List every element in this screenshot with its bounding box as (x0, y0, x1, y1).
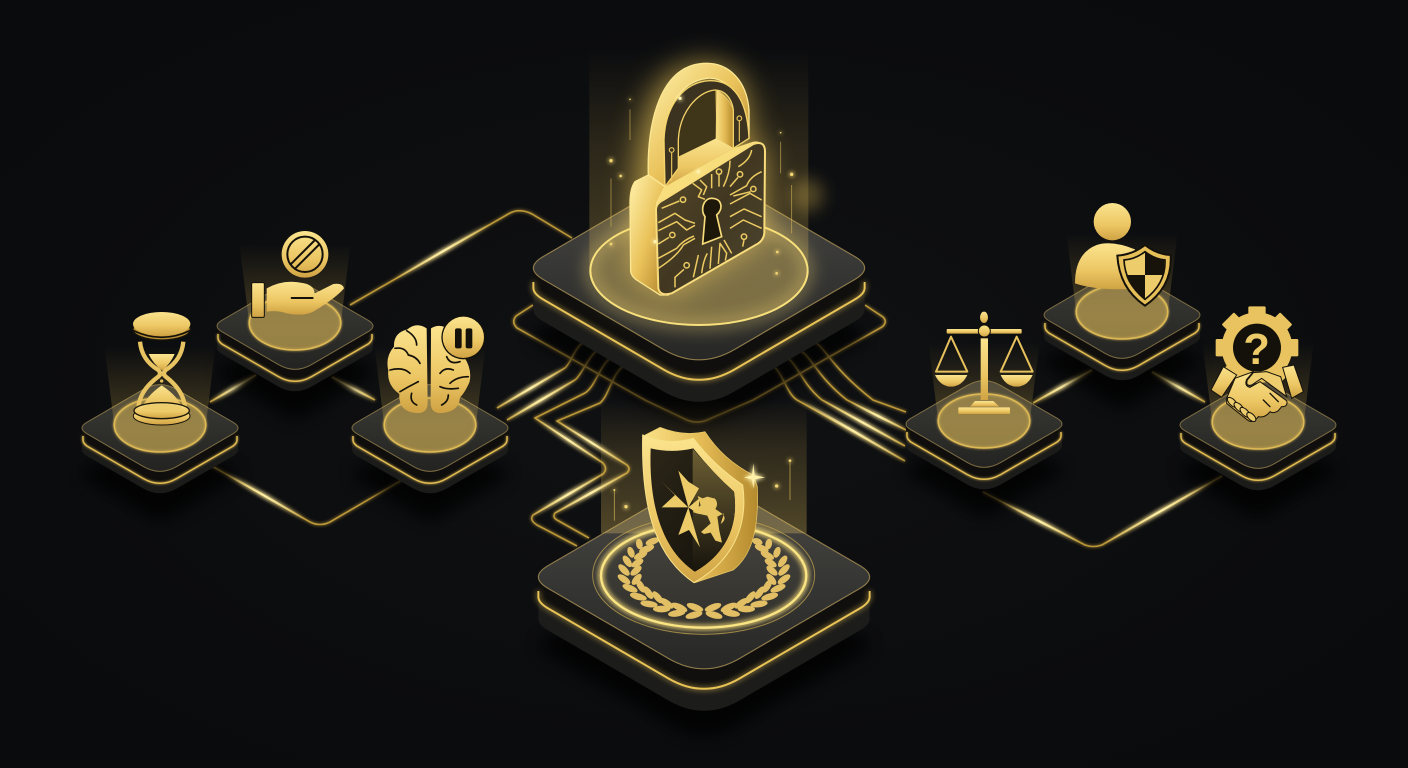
lock body side (630, 175, 668, 295)
icon: gear with handshake (1211, 306, 1303, 423)
icon: brain with pause badge (387, 315, 485, 413)
inner ring (601, 524, 806, 628)
lion (693, 496, 725, 543)
connector traces: right of lock (769, 363, 905, 461)
connector: hourglass to hand (210, 375, 256, 402)
connector: hourglass to brain (210, 465, 402, 524)
connector: person to gear (1152, 372, 1205, 402)
light beam (601, 400, 807, 533)
icon: hand with prohibited coin (252, 231, 344, 317)
platform: lock (533, 176, 865, 427)
connector: scales to gear (983, 476, 1222, 546)
icons: right cluster (935, 203, 1303, 423)
shackle opening (678, 90, 717, 168)
icon: hourglass (133, 312, 190, 425)
icon: shield with laurel (593, 400, 815, 634)
shield inner field (650, 448, 735, 572)
platform: brain (352, 346, 508, 520)
ring outline (590, 216, 808, 325)
keyhole (703, 198, 722, 244)
connector: scales to person (1033, 370, 1092, 403)
shackle outer band (648, 63, 749, 187)
sparkles (653, 97, 700, 243)
lock glow (631, 63, 765, 295)
shield extrusion (645, 427, 758, 583)
rising light lines (614, 462, 790, 521)
connector highlights (212, 224, 1215, 543)
shackle dark face (664, 81, 749, 187)
shackle circuit nodes (669, 116, 742, 182)
rising light lines (611, 109, 792, 233)
floating particles (613, 459, 791, 508)
platform: shield (538, 485, 870, 736)
light beam (589, 50, 808, 325)
lock body top (657, 141, 765, 203)
icons: left cluster (133, 231, 485, 425)
side glow (790, 178, 823, 212)
circuit traces (658, 150, 762, 287)
platform: person (1044, 233, 1200, 407)
glowing ring (590, 216, 808, 325)
shackle inner side (716, 90, 733, 148)
platform: gear (1180, 343, 1336, 517)
platform: scales (906, 342, 1062, 516)
outer ring (593, 516, 815, 634)
laurel wreath (616, 536, 792, 620)
lock body front (656, 143, 765, 294)
inner ring glow (601, 524, 806, 628)
shield right field (693, 449, 735, 572)
shackle base band (665, 138, 733, 187)
circuit connectors (210, 211, 1222, 546)
shield front rim (643, 435, 744, 583)
platform: hourglass (82, 346, 238, 520)
connector traces: left of lock (497, 341, 586, 408)
connector: loop around lock platform (514, 305, 885, 422)
connector: hand to brain (332, 377, 375, 400)
icon: padlock with light beam (589, 50, 823, 325)
platform: hand (217, 244, 373, 418)
question mark: ? (1243, 326, 1270, 374)
sparkle (744, 463, 765, 488)
icon: balance scales (935, 312, 1033, 414)
maltese cross (662, 471, 700, 547)
connector: hand to lock (350, 211, 572, 305)
floating particles (609, 98, 793, 275)
icon: person with shield (1075, 203, 1171, 306)
